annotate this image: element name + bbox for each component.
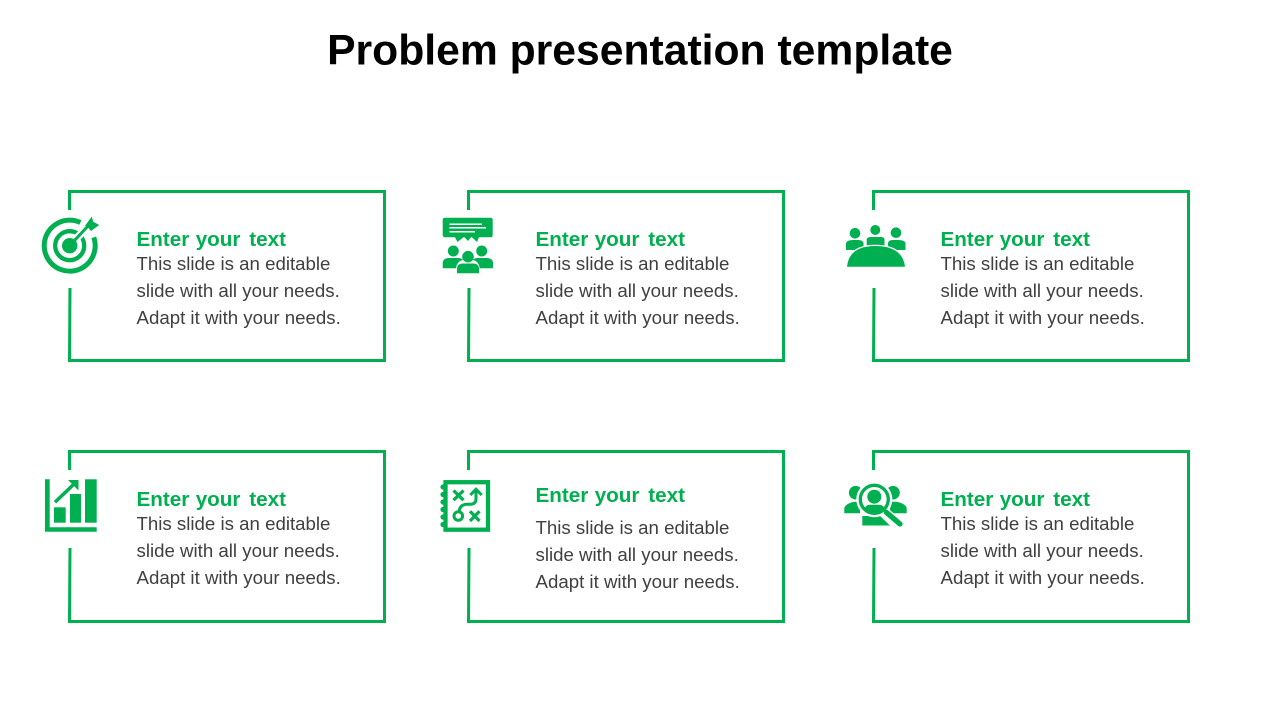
card 2 body text [536, 253, 740, 328]
icon: rising bar chart [45, 479, 97, 532]
card 3 heading: Enter [940, 228, 993, 251]
card 1 body text: Adapt it with your needs. [136, 307, 341, 328]
panel: card 3 [846, 192, 1188, 360]
panel: card 2 [443, 192, 784, 360]
card 6 heading: text [1053, 488, 1090, 511]
card 6 frame [874, 452, 1188, 622]
icon: magnifier over people [844, 481, 907, 526]
card 3 body text [940, 253, 1145, 328]
panel: card 6 [844, 452, 1188, 622]
card 5 frame [468, 452, 784, 622]
card 4 heading: Enter [136, 488, 189, 511]
card 6 body text: This slide is an editable [940, 513, 1134, 534]
card 5 heading: Enter [536, 484, 588, 507]
card 4 heading: your [196, 488, 240, 511]
card 1 body text [136, 253, 341, 328]
panel: card 4 [45, 452, 384, 622]
icon: strategy notebook [440, 482, 488, 530]
card 5 body text: Adapt it with your needs. [536, 571, 740, 592]
card 5 body text: This slide is an editable [536, 517, 729, 538]
card 2 body text: slide with all your needs. [536, 280, 739, 301]
card 4 body text: Adapt it with your needs. [136, 567, 341, 588]
card 2 body text: This slide is an editable [536, 253, 729, 274]
card 1 body text: slide with all your needs. [136, 280, 340, 301]
card 5 heading: your [595, 484, 639, 507]
card 1 frame [70, 192, 384, 360]
card 1 body text: This slide is an editable [136, 253, 330, 274]
card 1 heading: Enter [136, 228, 189, 251]
card 2 frame [468, 192, 784, 360]
card 4 heading: text [249, 488, 286, 511]
card 2 heading: Enter [536, 228, 588, 251]
panel: card 5 [440, 452, 784, 622]
card 3 heading: your [1000, 228, 1044, 251]
card 3 body text: This slide is an editable [940, 253, 1134, 274]
icon: speech bubble over people [443, 218, 493, 273]
card 5 body text: slide with all your needs. [536, 544, 739, 565]
card 2 heading: text [648, 228, 685, 251]
card 6 heading: Enter [940, 488, 993, 511]
card 3 body text: slide with all your needs. [940, 280, 1144, 301]
panel: card 1 [44, 192, 385, 360]
card 2 heading: your [595, 228, 639, 251]
card 5 heading: text [648, 484, 685, 507]
card 6 heading: your [1000, 488, 1044, 511]
card 1 heading: your [196, 228, 240, 251]
icon: people around a table [846, 225, 906, 267]
card 3 body text: Adapt it with your needs. [940, 307, 1145, 328]
card 5 body text [536, 517, 740, 592]
card 4 body text: This slide is an editable [136, 513, 330, 534]
card 4 body text [136, 513, 341, 588]
card 2 body text: Adapt it with your needs. [536, 307, 740, 328]
card 6 body text: Adapt it with your needs. [940, 567, 1145, 588]
card 6 body text: slide with all your needs. [940, 540, 1144, 561]
card 3 heading: text [1053, 228, 1090, 251]
title: Problem presentation template [327, 26, 953, 74]
card 1 heading: text [249, 228, 286, 251]
icon: target with arrow [44, 217, 99, 271]
card 4 frame [70, 452, 384, 622]
card 4 body text: slide with all your needs. [136, 540, 340, 561]
card 6 body text [940, 513, 1145, 588]
card 3 frame [874, 192, 1188, 360]
